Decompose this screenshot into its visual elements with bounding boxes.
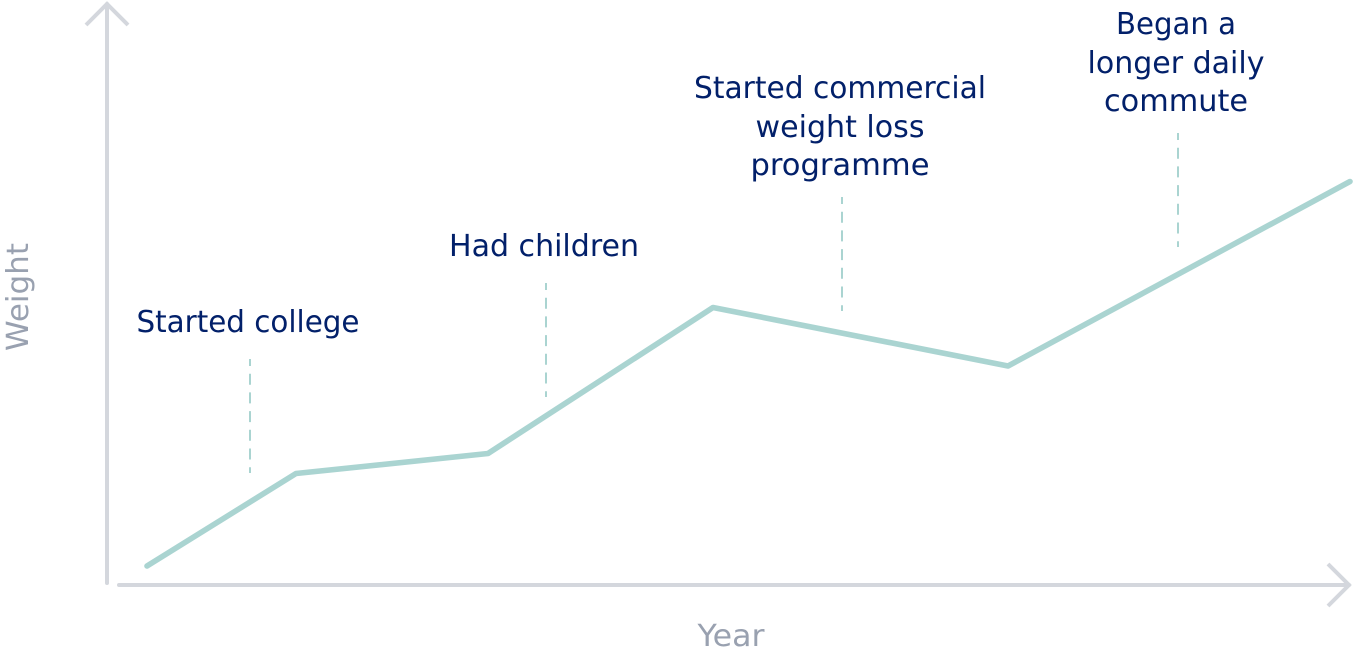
annotation: Started commercial weight loss programme: weight loss bbox=[756, 110, 924, 145]
x axis label: Year: Year bbox=[696, 619, 765, 654]
annotation: Had children: Had children bbox=[449, 229, 639, 264]
annotation: Began a longer daily commute bbox=[1088, 7, 1264, 247]
annotation: Started commercial weight loss programme: programme bbox=[750, 148, 930, 183]
annotation: Started college: Started college bbox=[136, 305, 360, 340]
y axis label: Weight: Weight bbox=[1, 243, 36, 351]
annotation: Started commercial weight loss programme: Started commercial bbox=[694, 71, 986, 106]
x axis with arrow bbox=[119, 564, 1349, 606]
annotation: Began a longer daily commute: Began a bbox=[1116, 7, 1236, 42]
weight trend line bbox=[147, 182, 1350, 566]
annotation: Began a longer daily commute: longer daily bbox=[1088, 46, 1264, 81]
annotation: Started commercial weight loss programme bbox=[694, 71, 986, 311]
y axis with arrow bbox=[86, 4, 128, 583]
annotation: Began a longer daily commute: commute bbox=[1104, 84, 1248, 119]
